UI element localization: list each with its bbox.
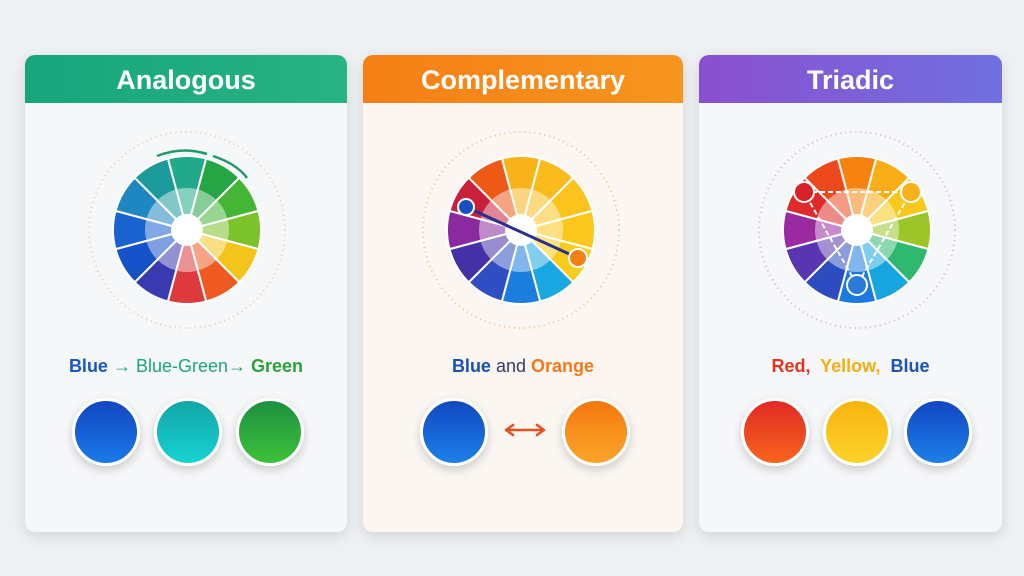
heading: Triadic — [699, 55, 1002, 103]
panel: triadic — [699, 55, 1002, 532]
arrow: double — [504, 424, 546, 436]
swatch: blue-green — [154, 398, 222, 466]
heading: Complementary: Complementary — [421, 65, 625, 95]
swatch: blue — [904, 398, 972, 466]
label: analogous colors: Blue → Blue-Green→ Green — [69, 356, 303, 376]
arrow: analogous arc — [157, 150, 247, 178]
panel: analogous — [25, 55, 347, 532]
swatch: yellow — [823, 398, 891, 466]
color wheel: triadic — [758, 131, 956, 329]
label: blue and orange: Blue and Orange — [452, 356, 594, 376]
heading: Analogous: Analogous — [116, 65, 256, 95]
swatch: blue — [72, 398, 140, 466]
heading: Triadic: Triadic — [807, 65, 894, 95]
heading: Complementary — [363, 55, 683, 103]
color wheel: analogous — [88, 131, 286, 329]
heading: Analogous — [25, 55, 347, 103]
swatch: red — [741, 398, 809, 466]
label: red yellow blue: Red, Yellow, Blue — [771, 356, 930, 376]
connector: triangle — [794, 182, 921, 295]
connector: complementary line — [458, 199, 587, 267]
swatch: green — [236, 398, 304, 466]
panel: complementary — [363, 55, 683, 532]
swatch: orange — [562, 398, 630, 466]
color wheel: complementary — [422, 131, 620, 329]
swatch: blue — [420, 398, 488, 466]
